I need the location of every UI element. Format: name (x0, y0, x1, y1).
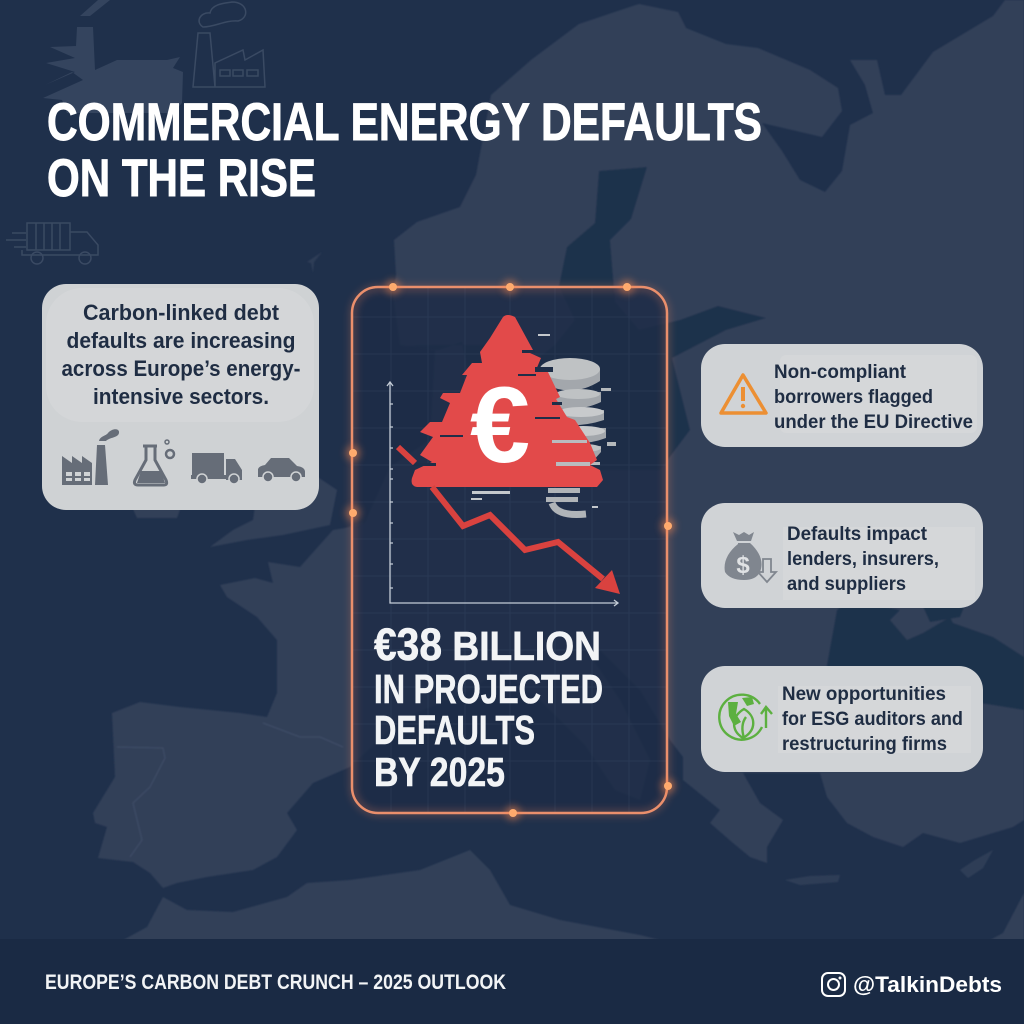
panel: carbon-linked debt (42, 284, 319, 510)
text block: new opportunities (782, 683, 963, 755)
panel: defaults impact (701, 503, 983, 608)
text block: new opportunities: New opportunities (782, 683, 946, 705)
panel: central statistic frame (346, 280, 675, 820)
text block: non-compliant borrowers: borrowers flagged (774, 386, 933, 408)
text block: carbon-linked debt summary: intensive sectors. (93, 384, 269, 409)
text block: non-compliant borrowers: Non-compliant (774, 361, 906, 383)
icon: faint outline factory (193, 2, 265, 87)
text block: defaults impact (787, 523, 939, 595)
title: ON THE RISE (47, 149, 316, 208)
text block: carbon-linked debt summary: defaults are increasing (66, 328, 296, 353)
grid lines (353, 288, 667, 813)
icon: faint delivery truck (6, 223, 98, 264)
icon: truck (191, 453, 242, 484)
borders (117, 723, 343, 857)
text block: new opportunities: for ESG auditors and (782, 708, 963, 730)
footer bar (0, 939, 1024, 1024)
text block: defaults impact: lenders, insurers, (787, 548, 939, 570)
icon: money bag with down arrow (725, 532, 776, 582)
title: COMMERCIAL ENERGY DEFAULTS (47, 93, 762, 152)
icon: coin stack (471, 334, 616, 515)
text block: carbon-linked debt summary (62, 300, 300, 409)
text block: headline statistic: DEFAULTS (374, 707, 535, 753)
icon: green globe and leaf (719, 695, 772, 740)
text block: carbon-linked debt summary: Carbon-linked debt (83, 300, 280, 325)
text block: headline statistic (374, 619, 603, 795)
text block: defaults impact: Defaults impact (787, 523, 927, 545)
text block: new opportunities: restructuring firms (782, 733, 947, 755)
icon: red warning triangle with euro: € (470, 364, 530, 485)
panel: non-compliant borrowers (701, 344, 983, 447)
icon: factory (62, 429, 119, 485)
title (47, 93, 762, 208)
icon: chemistry flask (134, 440, 174, 485)
icon: instagram (822, 973, 845, 996)
icon: warning triangle (721, 375, 766, 413)
glowing nodes (349, 283, 672, 817)
text block: headline statistic: IN PROJECTED (374, 666, 603, 712)
text block: non-compliant borrowers (774, 361, 973, 433)
Africa (123, 850, 660, 940)
icon: faint smokestack and factory silhouette (43, 0, 183, 113)
text block: carbon-linked debt summary: across Europe’s energy- (62, 356, 300, 381)
panel: new opportunities (701, 666, 983, 772)
chart axes (387, 382, 618, 606)
icon: red warning triangle with euro (412, 315, 603, 487)
text block: defaults impact: and suppliers (787, 573, 906, 595)
text block: headline statistic: BY 2025 (374, 749, 505, 795)
text block: headline statistic: €38 BILLION (374, 619, 601, 670)
icon: money bag with down arrow: $ (736, 552, 750, 579)
seas and gulfs (404, 167, 1024, 710)
social handle: @TalkinDebts (853, 972, 1002, 997)
islands (307, 252, 993, 885)
text block: non-compliant borrowers: under the EU Directive (774, 411, 973, 433)
footer title: EUROPE’S CARBON DEBT CRUNCH – 2025 OUTLOOK (45, 971, 506, 994)
icon: car (258, 458, 305, 482)
Great Britain (210, 470, 337, 547)
chart: falling red arrow (398, 447, 620, 594)
